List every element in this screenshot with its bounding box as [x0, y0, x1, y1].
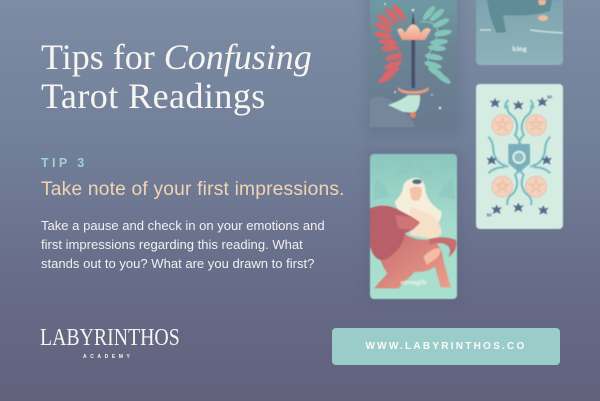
lion mane and head	[370, 206, 420, 260]
woman body	[410, 207, 442, 239]
flowers	[486, 97, 552, 215]
tip body text: stands out to you? What are you drawn to first?	[41, 256, 314, 271]
teal laurel	[420, 4, 452, 86]
logo: Labyrinthos Academy: ACADEMY	[83, 354, 133, 360]
tail	[428, 237, 456, 257]
cloud	[370, 96, 415, 127]
card: ace of swords	[366, 0, 461, 136]
red laurel	[374, 3, 408, 85]
tip body text: Take a pause and check in on your emotions and	[41, 218, 325, 233]
title: Tips for Confusing	[41, 37, 312, 77]
website button: WWW.LABYRINTHOS.CO	[365, 341, 527, 352]
headband	[412, 179, 422, 184]
card: five of pentacles	[476, 84, 563, 229]
card name: king	[512, 44, 527, 53]
card name: strength	[400, 277, 426, 286]
card numerals: 50	[547, 94, 553, 99]
logo: Labyrinthos Academy: LABYRINTHOS	[40, 325, 180, 351]
title: Tarot Readings	[41, 76, 266, 116]
tip label: TIP 3	[41, 156, 88, 170]
website button	[332, 328, 560, 365]
face	[409, 187, 422, 201]
card: five of pentacles: 50	[487, 213, 492, 218]
hair	[395, 178, 442, 225]
card: king	[476, 0, 563, 65]
crown	[397, 24, 431, 40]
card: strength	[366, 150, 461, 303]
title	[41, 37, 312, 116]
vines	[488, 100, 550, 205]
stars	[384, 3, 441, 109]
sword	[412, 12, 415, 88]
tip heading: Take note of your first impressions.	[41, 179, 345, 200]
shield	[508, 144, 530, 173]
tip body text: first impressions regarding this reading. What	[41, 237, 303, 252]
hand	[388, 95, 420, 113]
lion body	[374, 233, 451, 288]
tip body text	[41, 218, 325, 271]
woman's hand	[423, 248, 440, 265]
pentacle medallions	[492, 115, 546, 197]
background leaves	[372, 157, 455, 200]
